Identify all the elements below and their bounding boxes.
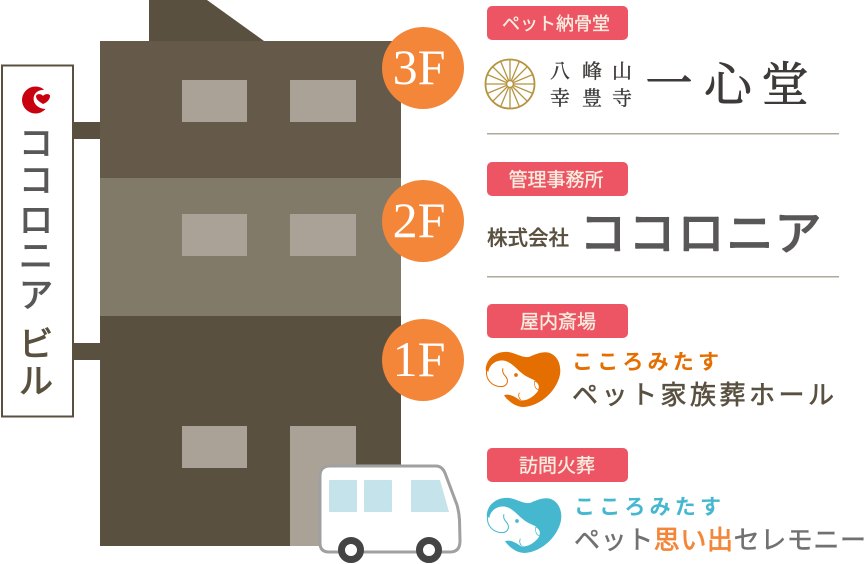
icon: orange heart dog: [486, 352, 560, 407]
brand name: 心: [704, 60, 754, 112]
sign text: ロ: [19, 202, 53, 240]
sign text: ビ: [19, 326, 53, 364]
floor 1 door: [290, 426, 356, 546]
building sign: [2, 66, 73, 416]
icon: gold wheel crest: [486, 60, 534, 108]
floor 1 window: [182, 426, 247, 468]
company name: コ: [628, 207, 676, 260]
temple name: 八: [550, 61, 570, 83]
floor 2 wall: [100, 178, 401, 316]
panel: mobile cremation: [487, 448, 866, 555]
brand name: 堂: [762, 60, 808, 112]
hall name: ペット家族葬ホール: [572, 380, 834, 410]
floor badge 3F: [382, 27, 464, 109]
company name: ニ: [726, 207, 774, 260]
label tag: [487, 448, 628, 482]
floor 2 windows: [182, 214, 356, 256]
label tag: 屋内斎場: [520, 311, 596, 333]
icon: teal heart dog: [487, 498, 561, 553]
brand name: 一: [646, 59, 692, 111]
temple name: 山: [612, 60, 632, 83]
sign text: ア: [19, 277, 53, 315]
company name: ア: [774, 207, 822, 260]
brand name: こころみたす: [572, 351, 719, 374]
service name: ペット思い出セレモニー: [574, 525, 866, 555]
company name: [580, 207, 822, 260]
panel: 3F pet columbarium: [486, 6, 808, 112]
sign text: ニ: [19, 238, 53, 276]
sign text: コ: [19, 162, 53, 200]
temple name: 峰: [582, 60, 602, 83]
label tag: [487, 6, 628, 40]
floor 1 wall: [100, 316, 401, 546]
bus: [320, 466, 460, 560]
company type: 株式会社: [487, 227, 569, 250]
temple name: 幸: [550, 87, 570, 110]
floor 3 wall: [100, 41, 401, 178]
brand name: [646, 59, 808, 112]
temple name: 豊: [582, 87, 602, 110]
bus wheels: [342, 540, 438, 560]
sign text: コ: [19, 125, 53, 163]
floor 3 windows: [182, 80, 356, 122]
roof: [149, 0, 264, 41]
company name: ロ: [678, 207, 724, 260]
sign text: [19, 125, 53, 401]
sign arm lower: [73, 343, 100, 360]
temple name: 寺: [612, 87, 632, 110]
label tag: 訪問火葬: [519, 455, 595, 477]
temple name: [550, 60, 632, 110]
label tag: ペット納骨堂: [502, 14, 610, 34]
panel: 1F indoor hall: [486, 304, 834, 410]
floor badge 1F: 1F: [393, 331, 445, 387]
label tag: [487, 304, 628, 338]
sign arm upper: [73, 122, 100, 139]
bus windows: [329, 480, 449, 512]
panel: 2F management office: [487, 162, 822, 260]
label tag: 管理事務所: [508, 169, 604, 191]
label tag: [487, 162, 628, 196]
floor badge 3F: 3F: [393, 39, 445, 95]
company name: コ: [580, 207, 626, 260]
bus body: [320, 466, 460, 552]
floor badge 2F: [382, 180, 464, 262]
floor badge 1F: [382, 319, 464, 401]
floor badge 2F: 2F: [393, 192, 445, 248]
sign text: ル: [19, 363, 53, 401]
brand name: こころみたす: [574, 496, 721, 519]
building illustration: [73, 0, 401, 546]
sign board: [2, 66, 73, 416]
icon: red company mark: [22, 86, 52, 114]
